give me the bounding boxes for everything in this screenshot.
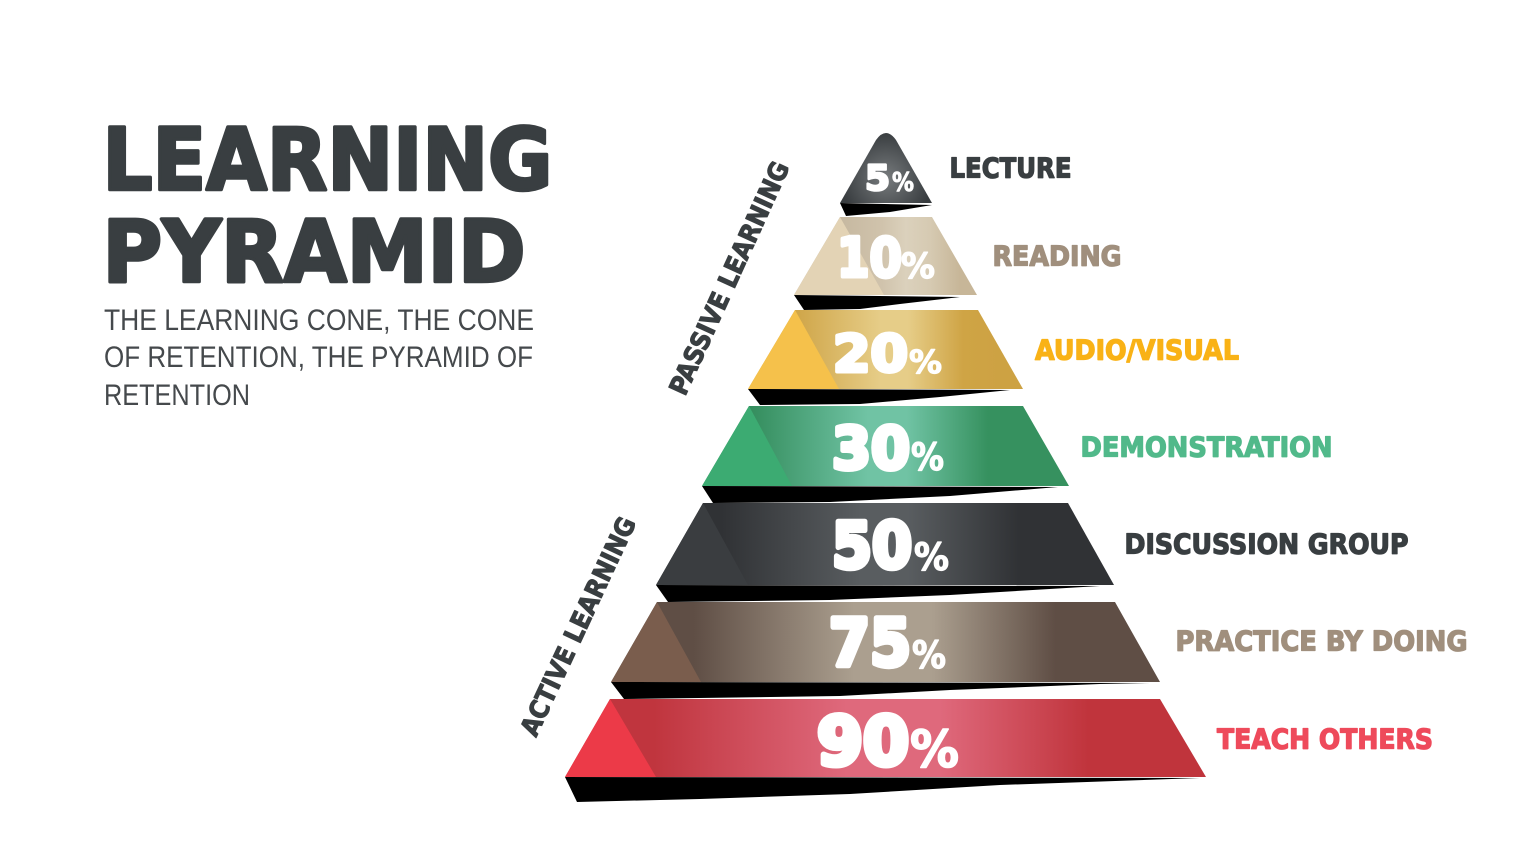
subtitle: THE LEARNING CONE, THE CONE: [104, 304, 534, 337]
tier: 5% lecture: 5: [865, 159, 890, 199]
tier: 10% reading: READING: [992, 240, 1122, 272]
tier: 5% lecture: LECTURE: [950, 152, 1072, 184]
tier: 30% demonstration: [702, 406, 1332, 503]
tier: 20% audio/visual: %: [909, 343, 942, 381]
tier: 50% discussion group: %: [914, 536, 949, 579]
tier: 10% reading: %: [901, 247, 935, 287]
tier: 5% lecture: [840, 133, 1072, 216]
tier: 75% practice by doing: %: [912, 634, 946, 677]
tier: 50% discussion group: DISCUSSION GROUP: [1124, 528, 1408, 560]
tier: 20% audio/visual: [748, 310, 1239, 405]
tier: 30% demonstration: DEMONSTRATION: [1080, 432, 1332, 464]
subtitle: RETENTION: [104, 379, 250, 412]
tier: 20% audio/visual: 20: [833, 326, 908, 384]
tier: 50% discussion group: [656, 503, 1408, 602]
subtitle: [104, 304, 534, 412]
tier: 5% lecture: %: [892, 168, 914, 198]
tier: 90% teach others: TEACH OTHERS: [1217, 724, 1433, 756]
passive learning label: PASSIVE LEARNING: [664, 157, 796, 400]
tier: 20% audio/visual: AUDIO/VISUAL: [1035, 334, 1239, 366]
title: PYRAMID: [102, 202, 526, 302]
tier: 30% demonstration: %: [911, 436, 944, 479]
tier: 10% reading: [794, 217, 1122, 310]
active learning label: ACTIVE LEARNING: [515, 513, 643, 741]
tier: 90% teach others: [565, 699, 1433, 802]
tier: 90% teach others: %: [910, 721, 959, 780]
tier: 50% discussion group: 50: [832, 510, 912, 582]
tier: 10% reading: 10: [837, 226, 902, 290]
title: LEARNING: [102, 110, 552, 210]
subtitle: OF RETENTION, THE PYRAMID OF: [104, 341, 533, 374]
title: [102, 110, 552, 302]
tier: 75% practice by doing: PRACTICE BY DOING: [1176, 626, 1468, 658]
tier: 30% demonstration: 30: [832, 414, 910, 482]
tier: 75% practice by doing: [611, 602, 1468, 699]
tier: 75% practice by doing: 75: [829, 606, 911, 682]
tier: 90% teach others: 90: [817, 702, 909, 780]
